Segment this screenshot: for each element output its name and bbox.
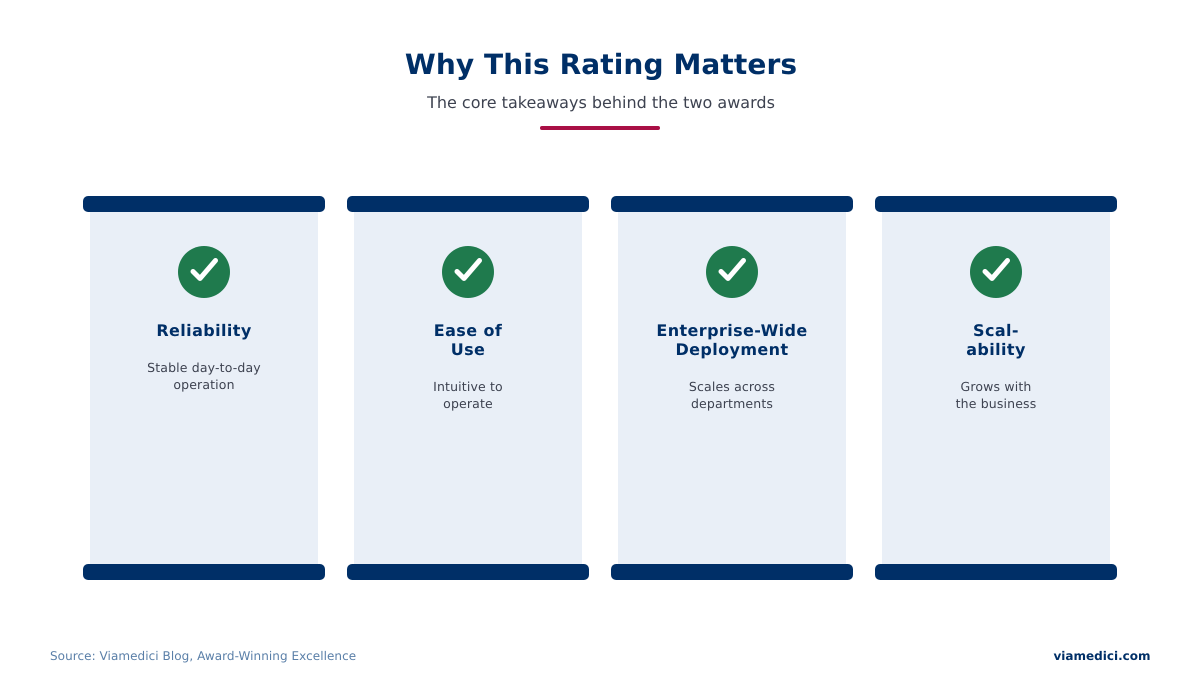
- text: Enterprise-Wide description: departments: [691, 396, 773, 411]
- heading: Enterprise-Wide Deployment: Enterprise-Wide: [656, 321, 808, 340]
- source note: Source: Viamedici Blog, Award-Winning Excellence: [50, 649, 356, 663]
- panel: Scalability: [875, 196, 1117, 580]
- text: Scalability description: Grows with: [961, 379, 1031, 394]
- heading: Scalability: Scal-: [973, 321, 1019, 340]
- icon: check badge: [178, 246, 230, 298]
- heading: Ease of Use: Ease of: [434, 321, 503, 340]
- text: Scalability description: the business: [956, 396, 1036, 411]
- text: Reliability description: operation: [173, 377, 235, 392]
- panel: Ease of Use: [347, 196, 589, 580]
- brand: viamedici.com: [1053, 649, 1150, 663]
- title accent rule: [540, 126, 660, 130]
- icon: check badge: [706, 246, 758, 298]
- heading: Ease of Use: Use: [451, 340, 485, 359]
- icon: check badge: [442, 246, 494, 298]
- heading: Enterprise-Wide Deployment: Deployment: [675, 340, 789, 359]
- text: Enterprise-Wide description: Scales across: [689, 379, 775, 394]
- icon: check badge: [970, 246, 1022, 298]
- text: Reliability description: Stable day-to-day: [147, 360, 261, 375]
- text: Ease of Use description: operate: [443, 396, 493, 411]
- panel: Enterprise-Wide Deployment: [611, 196, 853, 580]
- heading: Reliability: Reliability: [156, 321, 252, 340]
- heading: Scalability: ability: [966, 340, 1026, 359]
- text: Ease of Use description: Intuitive to: [433, 379, 503, 394]
- subtitle: The core takeaways behind the two awards: [426, 93, 775, 112]
- title: Why This Rating Matters: [405, 48, 797, 81]
- panel: Reliability: [83, 196, 325, 580]
